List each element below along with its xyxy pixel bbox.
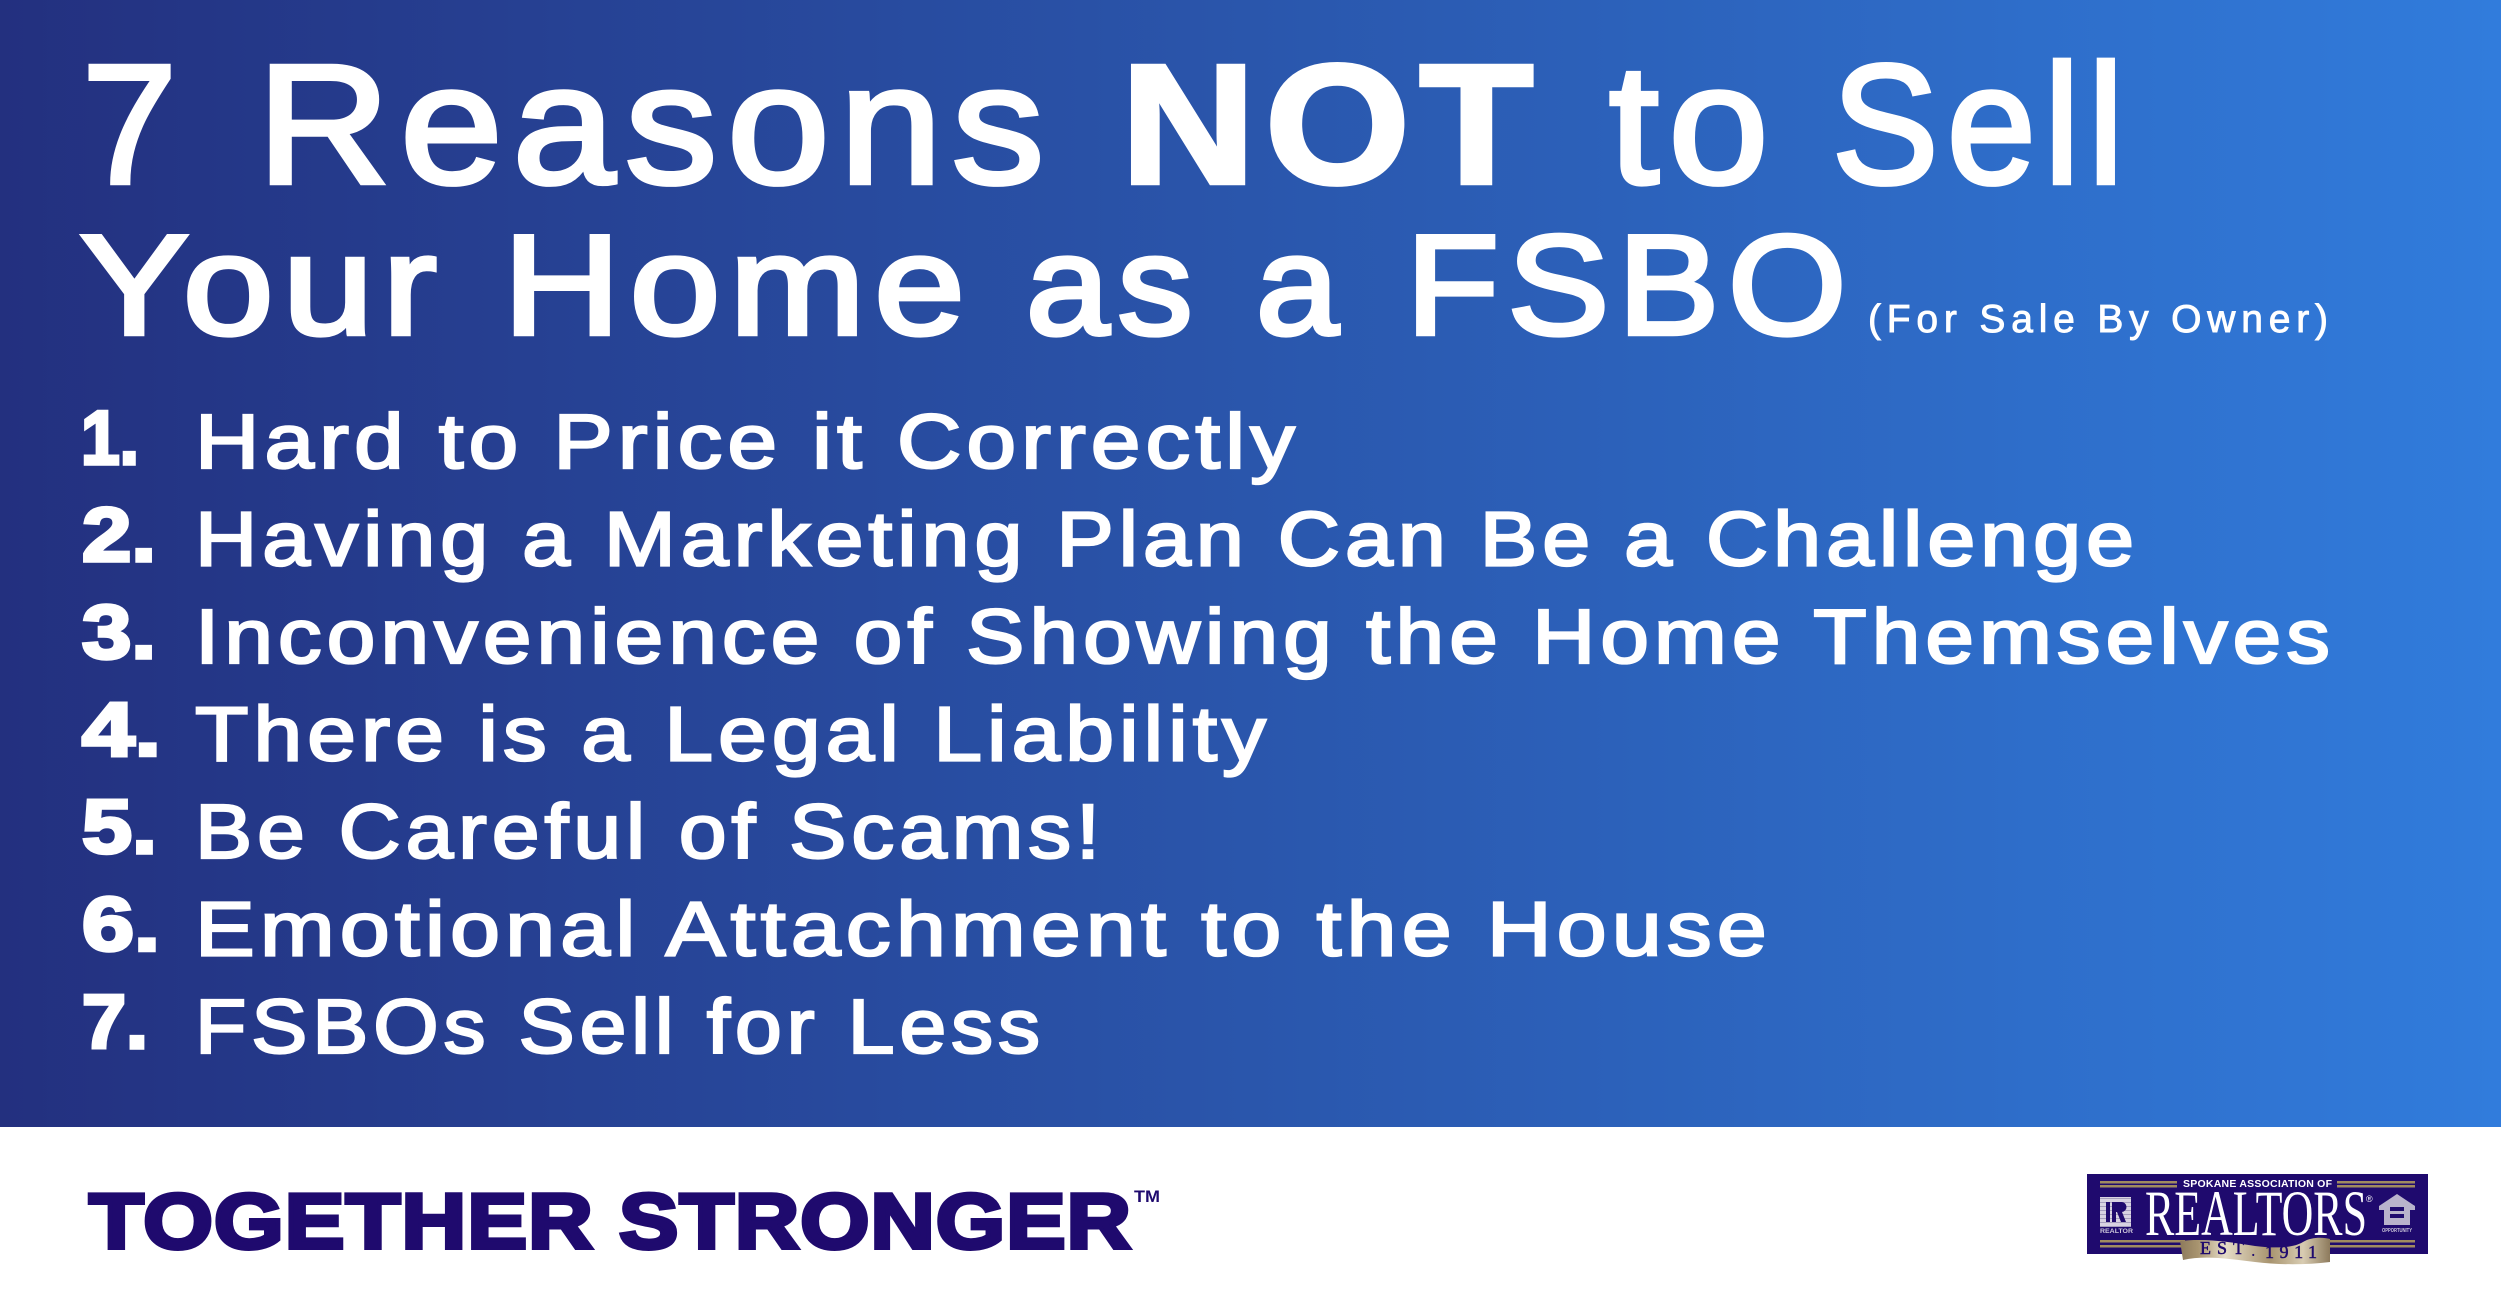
logo heading: SPOKANE ASSOCIATION OF (2183, 1178, 2333, 1190)
logo registered mark: ® (2366, 1194, 2373, 1204)
reason 6: 6. (82, 882, 160, 968)
title: Your (80, 206, 446, 365)
reason 7: 7. (82, 980, 148, 1065)
title (80, 30, 2132, 365)
reason 6: Emotional Attachment to the House (195, 886, 1772, 972)
reason 3: Inconvenience of Showing the Home Themselves (195, 594, 2335, 680)
slogan: together stronger: STRONGER (619, 1177, 1132, 1265)
logo: Spokane Association of Realtors (2087, 1174, 2428, 1264)
reason 4: 4. (82, 688, 161, 772)
reasons list (81, 396, 2335, 1070)
logo wordmark: REALTORS (2145, 1178, 2367, 1250)
title: a (1256, 206, 1347, 365)
title: to (1609, 30, 1778, 220)
logo equal housing icon: OPPORTUNITY (2382, 1228, 2413, 1234)
slogan: together stronger: TM (1134, 1187, 1160, 1206)
logo equal housing icon (2379, 1194, 2415, 1234)
logo ribbon: . (2251, 1240, 2256, 1260)
reason 1: 1. (81, 396, 139, 481)
white footer panel (0, 1127, 2501, 1309)
logo background (2087, 1174, 2428, 1254)
logo gold rules (2100, 1181, 2415, 1248)
logo R icon (2100, 1197, 2134, 1235)
title: Home (503, 206, 974, 365)
title: as (1026, 206, 1201, 365)
title: Sell (1832, 30, 2132, 220)
slogan: together stronger (89, 1177, 1160, 1265)
logo ribbon: 1911 (2265, 1242, 2317, 1262)
title: 7 (82, 30, 186, 220)
title: FSBO (1406, 206, 1855, 365)
reason 7: FSBOs Sell for Less (195, 984, 1045, 1070)
logo ribbon: EST (2200, 1238, 2244, 1258)
reason 2: Having a Marketing Plan Can Be a Challenge (195, 496, 2139, 582)
title: Reasons (257, 30, 1054, 220)
reason 3: 3. (82, 590, 156, 675)
slogan: together stronger: TOGETHER (89, 1177, 594, 1265)
reason 5: 5. (82, 785, 157, 870)
logo ribbon (2180, 1238, 2330, 1264)
title: NOT (1121, 30, 1543, 220)
subtitle: for sale by owner: (For Sale By Owner) (1868, 298, 2328, 341)
reason 1: Hard to Price it Correctly (195, 399, 1300, 485)
reason 2: 2. (82, 493, 156, 578)
logo R icon: REALTOR (2100, 1229, 2134, 1235)
reason 4: There is a Legal Liability (195, 692, 1271, 778)
reason 5: Be Careful of Scams! (195, 789, 1105, 875)
